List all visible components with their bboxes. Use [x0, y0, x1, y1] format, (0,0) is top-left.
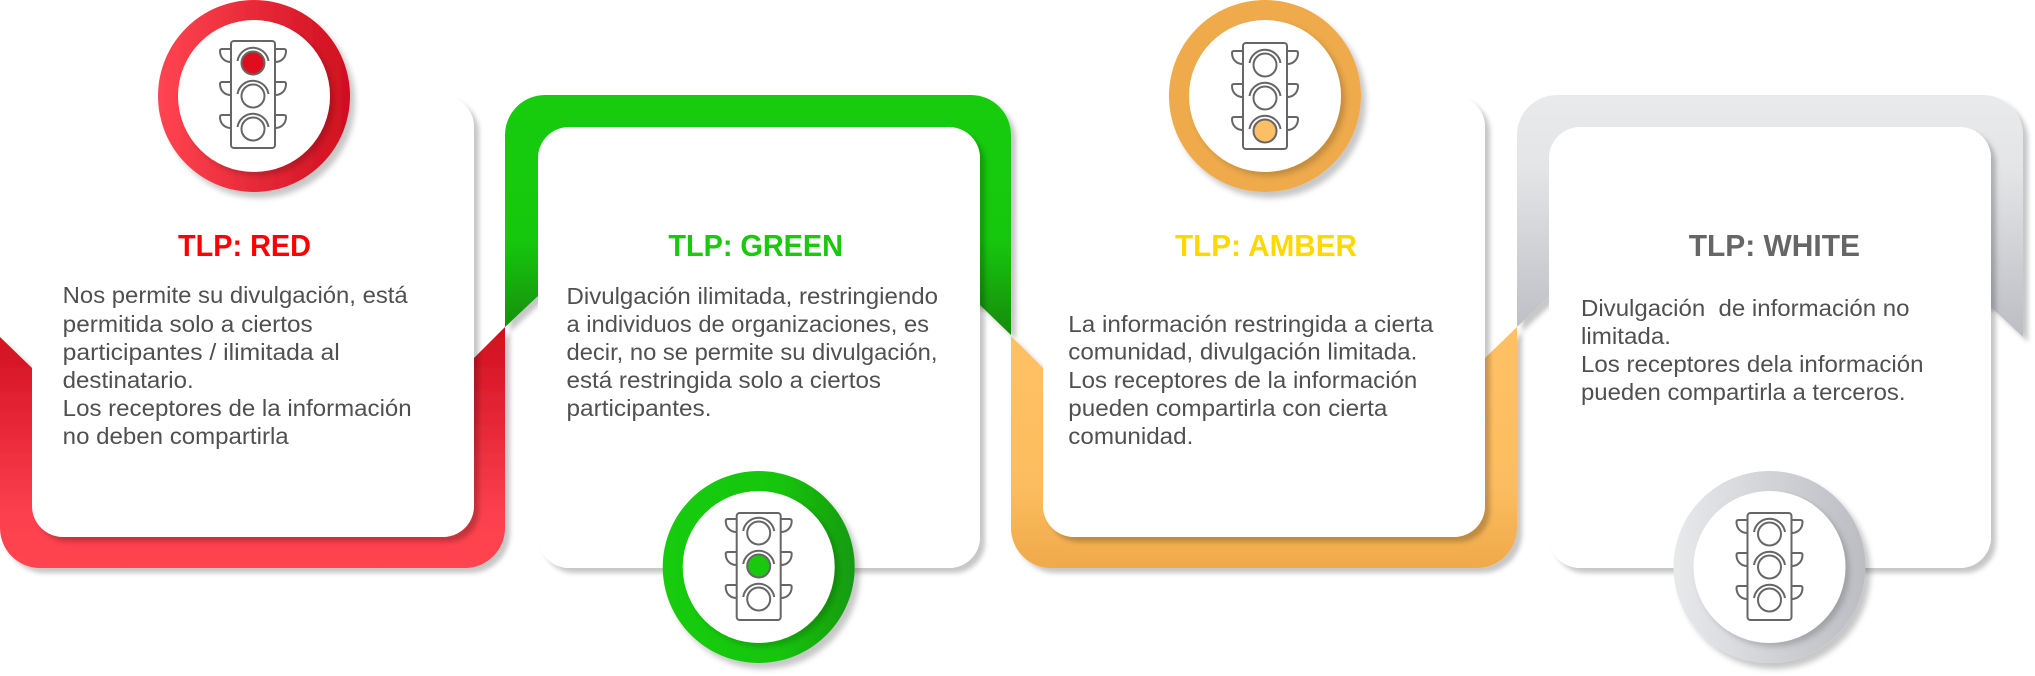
green heading: TLP: GREEN — [668, 228, 843, 263]
amber body text: La información restringida a cierta — [1068, 311, 1434, 337]
red ring badge — [158, 0, 350, 192]
green body text: Divulgación ilimitada, restringiendo — [566, 283, 938, 309]
green ring badge — [663, 471, 855, 663]
panel: TLP GREEN — [505, 95, 1011, 663]
red heading: TLP: RED — [178, 228, 311, 263]
panel: TLP AMBER — [1011, 0, 1517, 568]
red body text: no deben compartirla — [63, 423, 289, 449]
green body text: a individuos de organizaciones, es — [566, 311, 929, 337]
white heading: TLP: WHITE — [1689, 228, 1860, 263]
icon: traffic light, green lit — [726, 513, 792, 620]
white ring badge — [1674, 471, 1866, 663]
amber body text — [1068, 311, 1434, 449]
red ribbon band — [0, 327, 505, 568]
green ribbon band — [505, 95, 1011, 335]
icon: traffic light, none lit — [1736, 513, 1802, 620]
white body text — [1581, 295, 1924, 405]
green body text: participantes. — [566, 395, 712, 421]
amber ring badge — [1169, 0, 1361, 192]
white body text: pueden compartirla a terceros. — [1581, 379, 1906, 405]
red body text: Los receptores de la información — [63, 395, 412, 421]
green body text: está restringida solo a ciertos — [566, 367, 881, 393]
red body text: permitida solo a ciertos — [63, 311, 313, 337]
panel: TLP WHITE — [1517, 95, 2023, 663]
panel: TLP RED — [0, 0, 505, 568]
amber ribbon band — [1011, 327, 1517, 568]
amber heading: TLP: AMBER — [1175, 228, 1357, 263]
green white card — [538, 127, 980, 568]
red body text: destinatario. — [63, 367, 194, 393]
icon: traffic light, amber lit — [1232, 43, 1298, 149]
amber body text: comunidad. — [1068, 423, 1193, 449]
white body text: limitada. — [1581, 323, 1671, 349]
amber body text: pueden compartirla con cierta — [1068, 395, 1388, 421]
white panel card — [1549, 127, 1991, 568]
white body text: Divulgación de información no — [1581, 295, 1910, 321]
amber body text: Los receptores de la información — [1068, 367, 1417, 393]
white ribbon band — [1517, 95, 2023, 337]
green body text — [566, 283, 938, 421]
amber white card — [1043, 96, 1485, 537]
red body text: participantes / ilimitada al — [63, 339, 340, 365]
green body text: decir, no se permite su divulgación, — [566, 339, 938, 365]
red white card — [32, 96, 474, 537]
icon: traffic light, red lit — [220, 41, 286, 148]
white body text: Los receptores dela información — [1581, 351, 1924, 377]
red body text — [63, 282, 412, 449]
amber body text: comunidad, divulgación limitada. — [1068, 338, 1417, 364]
red body text: Nos permite su divulgación, está — [63, 282, 408, 308]
